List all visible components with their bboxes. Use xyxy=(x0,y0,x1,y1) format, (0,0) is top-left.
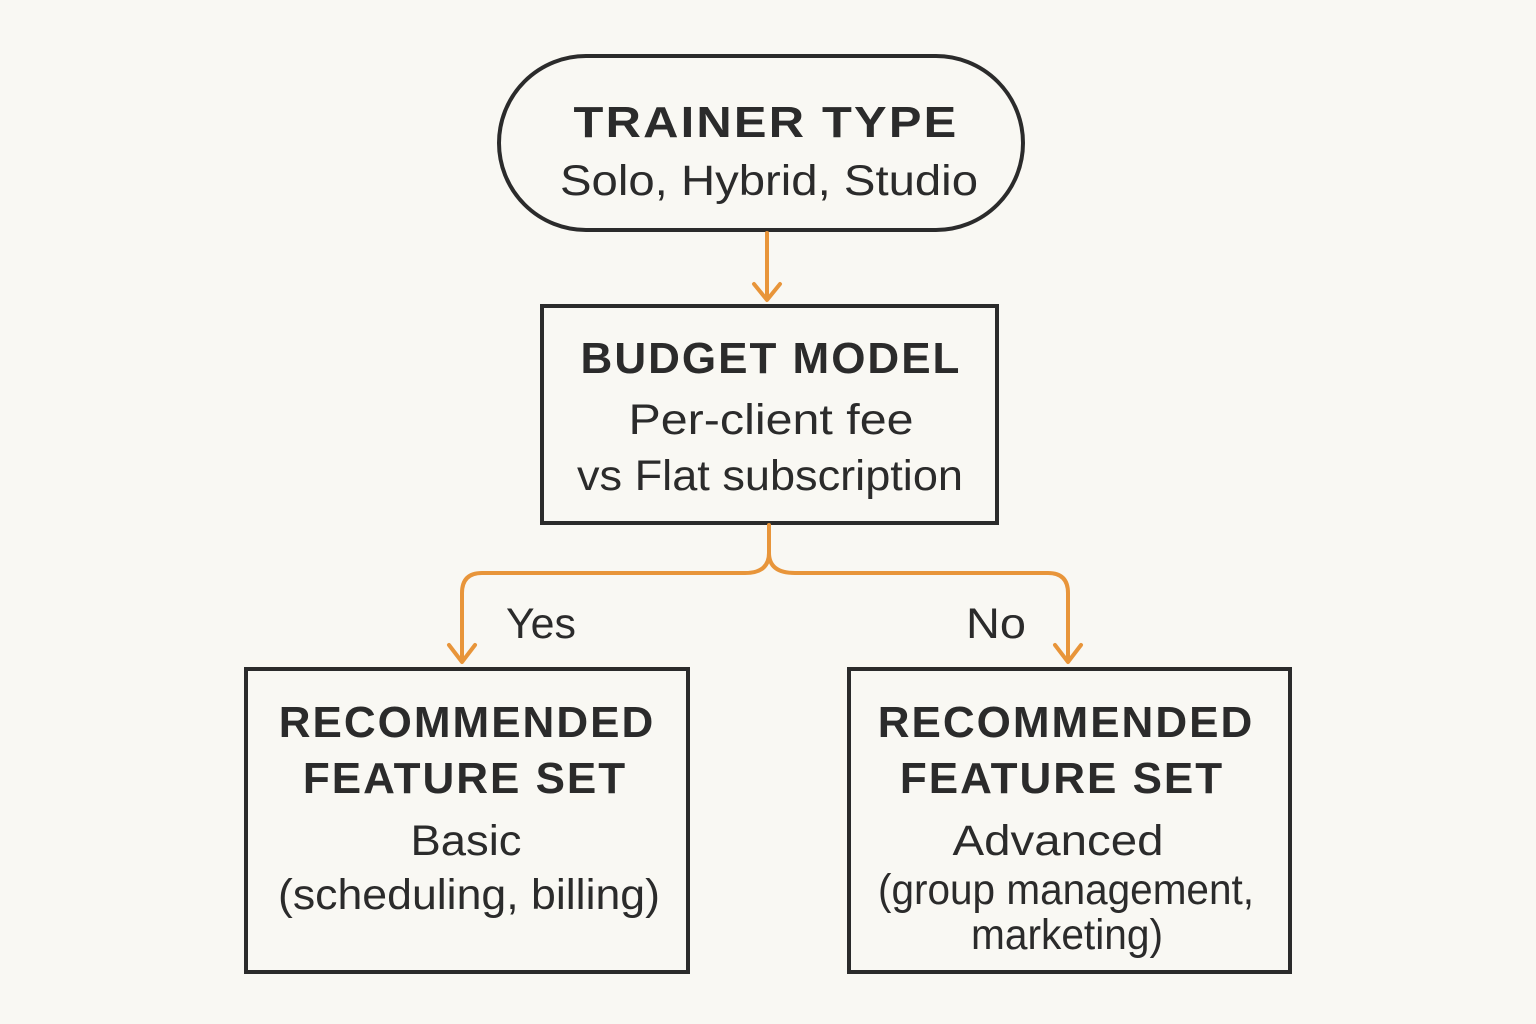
arrows: branches xyxy=(449,525,1081,662)
node: budget model: vs Flat subscription xyxy=(577,452,963,500)
text: basic: Basic xyxy=(410,817,522,865)
text: trainer options: Solo, Hybrid, Studio xyxy=(560,157,978,205)
text: advanced: Advanced xyxy=(952,817,1164,865)
arrow: trainer to budget xyxy=(754,233,780,300)
heading: recommended feature set advanced: RECOMMENDED xyxy=(878,698,1254,747)
node: trainer type xyxy=(499,56,1023,230)
heading: recommended feature set basic: RECOMMENDED xyxy=(279,698,655,747)
node: advanced feature set xyxy=(849,669,1290,972)
node: budget model xyxy=(542,306,997,523)
label: no: No xyxy=(966,600,1026,648)
heading: budget model: BUDGET MODEL xyxy=(581,334,961,383)
node: advanced feature set: FEATURE SET xyxy=(900,754,1224,803)
node: advanced feature set: marketing) xyxy=(971,911,1163,959)
node: basic feature set xyxy=(246,669,688,972)
text: budget options: Per-client fee xyxy=(628,396,914,444)
label: yes: Yes xyxy=(506,600,576,648)
heading: trainer type: TRAINER TYPE xyxy=(574,98,958,147)
node: basic feature set: (scheduling, billing) xyxy=(278,871,660,919)
node: advanced feature set: (group management, xyxy=(878,866,1254,914)
node: basic feature set: FEATURE SET xyxy=(303,754,627,803)
